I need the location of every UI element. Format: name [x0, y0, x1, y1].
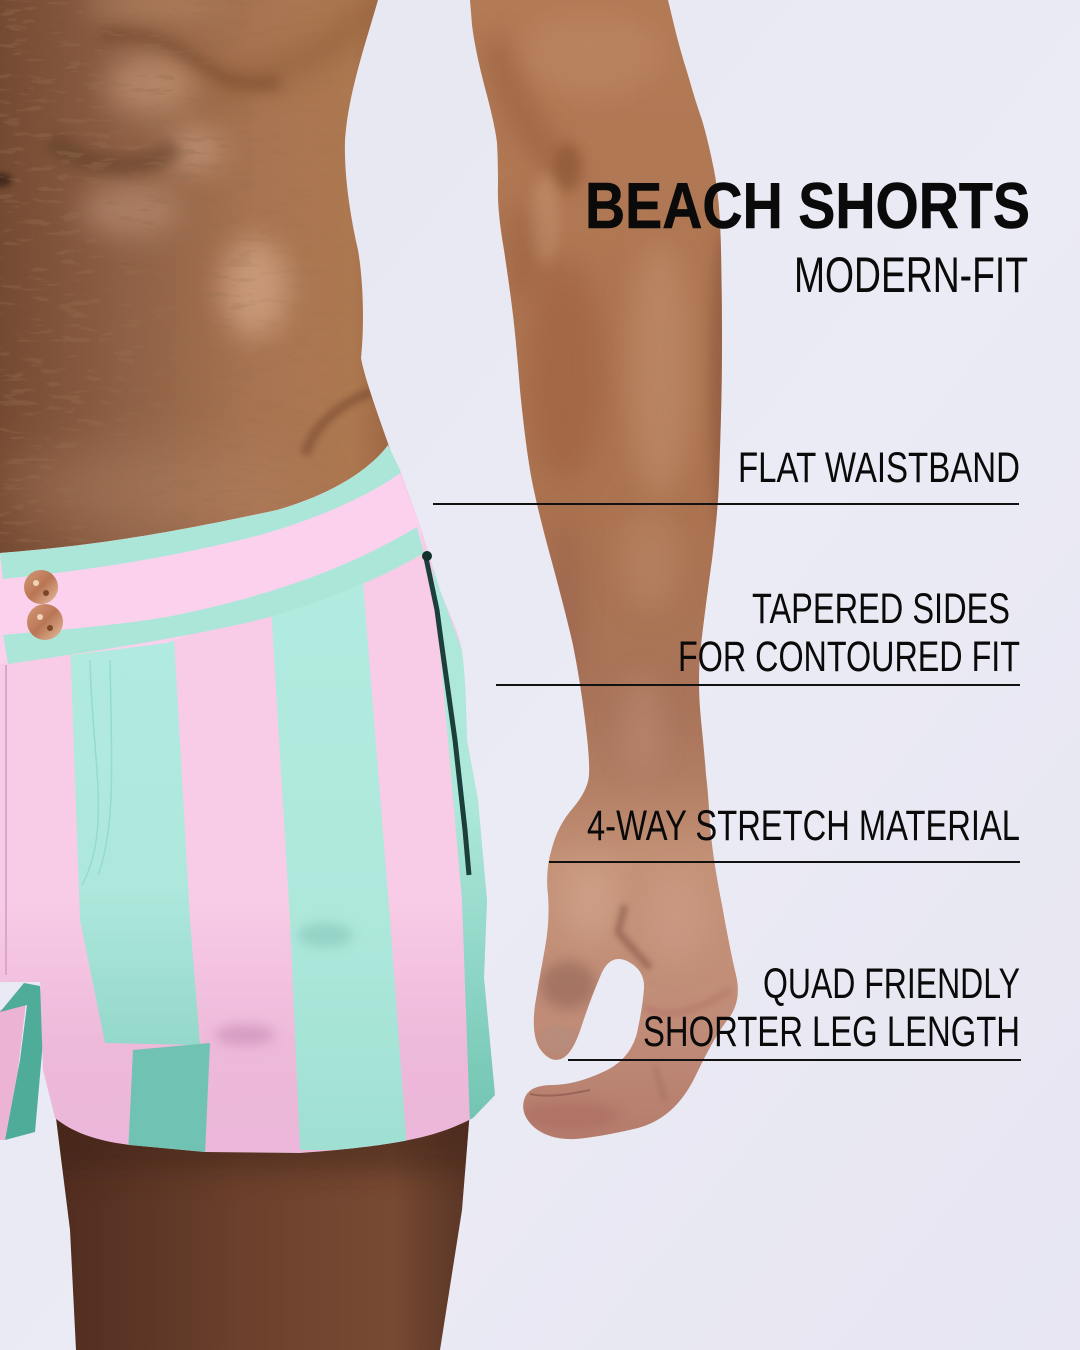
fly seam: [82, 660, 112, 885]
teal stripes: [70, 560, 495, 1150]
model arm and hand: [470, 0, 738, 1140]
far leg of shorts: [0, 983, 44, 1140]
gold snap buttons: [24, 570, 63, 640]
fabric fold shadows: [215, 1025, 275, 1045]
striped beach shorts: [0, 445, 495, 1153]
zipper pocket: [422, 551, 469, 875]
waistband panel: [2, 445, 388, 656]
title: [585, 169, 1030, 303]
waistband bottom trim: [3, 527, 424, 664]
model leg: [56, 1118, 470, 1350]
callout: tapered sides: [496, 585, 1020, 686]
waistband top trim: [0, 445, 402, 579]
main shorts panel: [0, 445, 495, 1153]
model torso: [0, 0, 390, 553]
lower teal fold: [128, 1043, 210, 1155]
callout: leg length: [568, 960, 1021, 1061]
body hair texture: [0, 0, 256, 542]
